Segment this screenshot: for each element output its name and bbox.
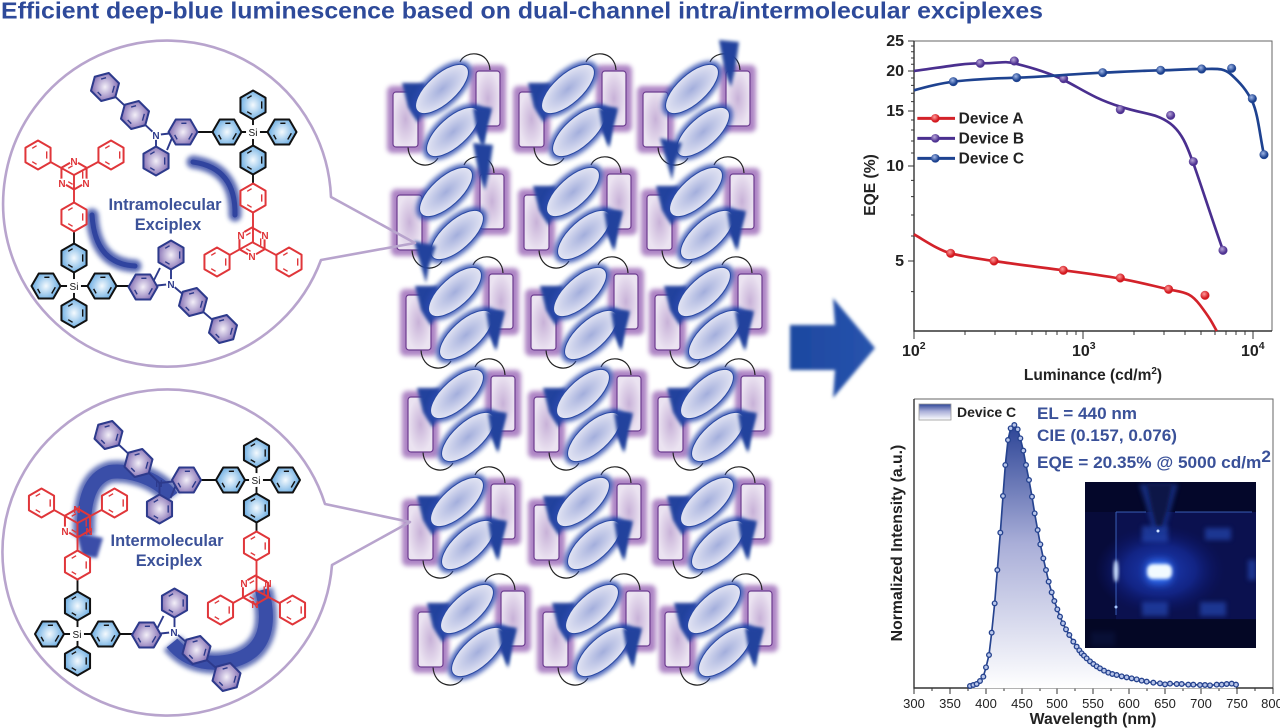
photo inset: glowing device (1085, 482, 1256, 648)
legend: devices: Device A (959, 111, 1024, 128)
callout bubble: intramolecular (3, 41, 415, 367)
atom labels: intramolecular pair (58, 125, 270, 293)
x-axis title: 2 (1151, 366, 1157, 377)
y-axis tick labels: 20 (886, 63, 904, 80)
x-axis title: Wavelength (nm) (1030, 711, 1156, 728)
x-axis tick labels: 650 (1154, 696, 1176, 711)
x-axis tick labels: 3 (1090, 340, 1096, 352)
atom labels: intermolecular pair: N (73, 505, 81, 516)
y-axis tick labels: 25 (886, 33, 904, 50)
y-axis title: Normalized Intensity (a.u.) (889, 445, 906, 641)
x-axis tick labels: 10 (1241, 343, 1259, 360)
legend swatch: Device C (919, 404, 1016, 420)
chart: electroluminescence spectrum (889, 399, 1280, 728)
atom labels: intramolecular pair: Si (249, 128, 257, 139)
atom labels: intermolecular pair: N (155, 479, 163, 490)
atom labels: intramolecular pair: N (70, 157, 78, 168)
atom labels: intermolecular pair: N (240, 579, 248, 590)
label: intramolecular exciplex: Intramolecular (109, 196, 222, 214)
atom labels: intermolecular pair: N (61, 527, 69, 538)
panel: molecular film grid (387, 40, 778, 690)
text block: device metrics (1037, 404, 1271, 472)
curve: Device C (914, 64, 1268, 159)
atom labels: intramolecular pair: N (248, 252, 256, 263)
atom labels: intermolecular pair: N (264, 579, 272, 590)
y-axis title: EQE (%) (862, 154, 879, 216)
arrow: lower intramolecular charge transfer (92, 215, 135, 266)
panel: intramolecular callout (3, 41, 415, 367)
atom labels: intermolecular pair: N (170, 628, 178, 639)
label: intramolecular exciplex: Exciplex (135, 216, 201, 234)
x-axis tick labels: 300 (903, 696, 925, 711)
arrow: upper intramolecular charge transfer (193, 162, 235, 215)
chart axes (914, 399, 1273, 688)
x-axis tick labels (903, 696, 1280, 711)
x-axis tick labels: 400 (975, 696, 997, 711)
y-axis tick labels: 10 (886, 158, 904, 175)
legend: devices: Device B (959, 131, 1024, 148)
atom labels: intermolecular pair: N (251, 600, 259, 611)
y-axis tick labels: 5 (895, 253, 904, 270)
label: intramolecular exciplex (109, 196, 222, 234)
atom labels: intermolecular pair: N (85, 527, 93, 538)
atom labels: intramolecular pair: N (261, 231, 269, 242)
arrow: lower intermolecular charge transfer (172, 590, 266, 663)
y-axis tick labels: 15 (886, 103, 904, 120)
curve: Device B (914, 57, 1227, 255)
chart axes (914, 41, 1272, 331)
x-axis title: Luminance (cd/m (1024, 367, 1151, 384)
x-axis tick labels: 700 (1190, 696, 1212, 711)
atom labels: intramolecular pair: Si (70, 282, 78, 293)
chart: EQE versus luminance (862, 33, 1272, 384)
atom labels: intramolecular pair: N (167, 280, 175, 291)
x-axis tick labels: 350 (939, 696, 961, 711)
text block: device metrics: 2 (1261, 447, 1271, 466)
legend: devices (917, 111, 1024, 168)
atom labels: intramolecular pair: N (82, 179, 90, 190)
curves and markers (914, 57, 1268, 331)
curve: Device A (914, 234, 1217, 331)
panel: intermolecular callout (2, 390, 410, 716)
x-axis tick labels: 10 (1072, 343, 1090, 360)
x-axis tick labels: 600 (1118, 696, 1140, 711)
x-axis tick labels (902, 340, 1265, 360)
molecule: intramolecular pair (25, 70, 302, 346)
atom labels: intramolecular pair: N (237, 231, 245, 242)
legend: devices: Device C (959, 151, 1024, 168)
atom labels: intermolecular pair: Si (73, 630, 81, 641)
text block: device metrics: EL = 440 nm (1037, 404, 1137, 423)
callout bubble: intermolecular (2, 390, 410, 716)
x-axis tick labels: 2 (920, 340, 926, 352)
label: intermolecular exciplex: Exciplex (136, 552, 202, 570)
x-axis tick labels: 550 (1082, 696, 1104, 711)
molecule: intermolecular pair (29, 418, 305, 694)
arrow: upper intermolecular charge transfer (76, 472, 172, 558)
label: intermolecular exciplex (111, 532, 224, 570)
atom labels: intermolecular pair: Si (252, 476, 260, 487)
text block: device metrics: CIE (0.157, 0.076) (1037, 426, 1177, 445)
y-axis tick labels (886, 33, 904, 270)
x-axis tick labels: 750 (1226, 696, 1248, 711)
x-axis tick labels: 450 (1011, 696, 1033, 711)
label: intermolecular exciplex: Intermolecular (111, 532, 224, 550)
x-axis tick labels: 4 (1259, 340, 1265, 352)
atom labels: intramolecular pair: N (58, 179, 66, 190)
x-axis tick labels: 10 (902, 343, 920, 360)
atom labels: intermolecular pair (60, 473, 272, 641)
atom labels: intramolecular pair: N (152, 131, 160, 142)
legend swatch: Device C: Device C (957, 404, 1016, 420)
x-axis title: ) (1157, 367, 1162, 384)
text block: device metrics: EQE = 20.35% @ 5000 cd/m (1037, 453, 1258, 472)
spectrum curve (970, 425, 1236, 688)
x-axis tick labels: 500 (1046, 696, 1068, 711)
arrow: big right arrow (790, 298, 875, 398)
